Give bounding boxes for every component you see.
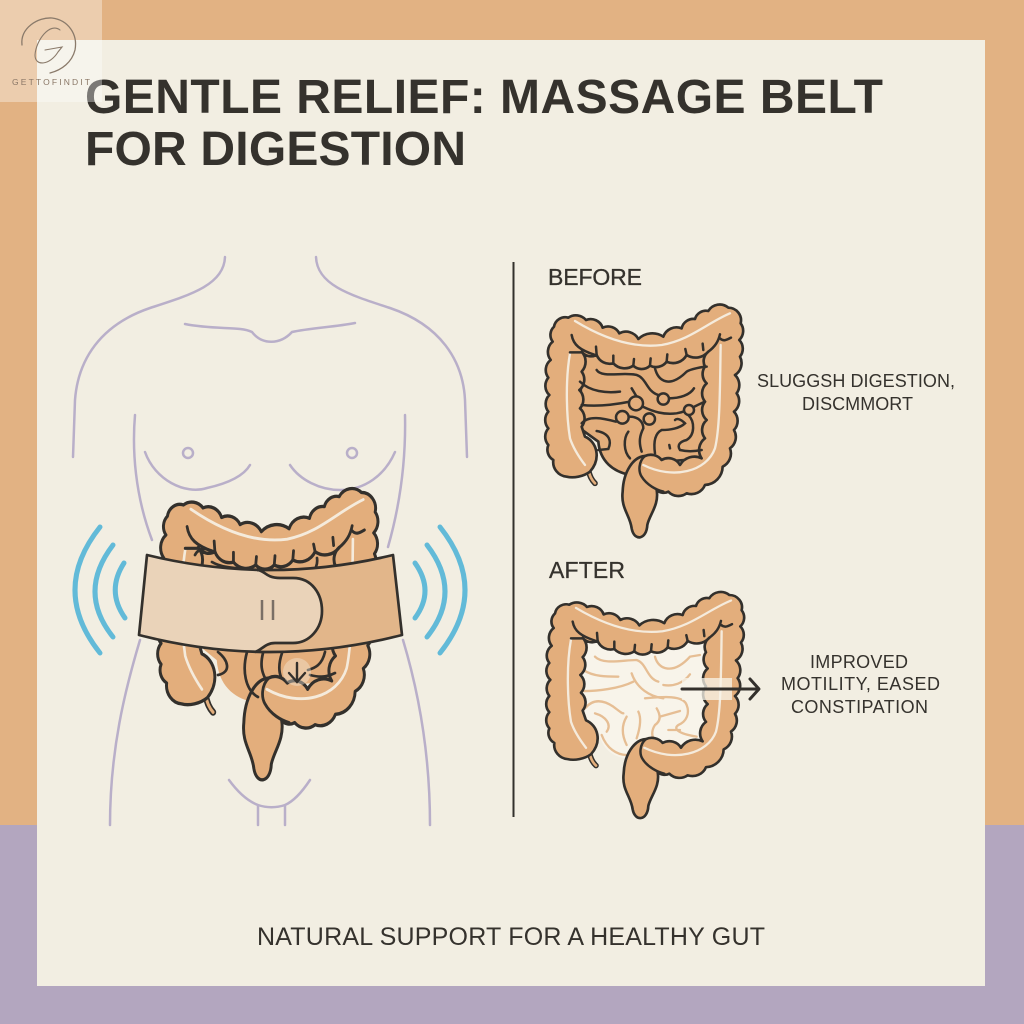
appendix: [588, 470, 595, 483]
title: GENTLE RELIEF: MASSAGE BELT: [85, 71, 883, 124]
massage belt: [139, 555, 402, 652]
small intestine mass: [196, 545, 339, 702]
logo swoosh and G: [22, 18, 76, 73]
colon: [158, 489, 378, 780]
arrow: after to caption: [682, 678, 759, 700]
icon: down arrow: [283, 658, 311, 686]
small intestine mass: [580, 350, 708, 475]
tangled intestine lines: [580, 367, 707, 458]
before colon illustration: [545, 305, 743, 537]
relaxed small intestine: [580, 640, 707, 758]
before caption: DISCMMORT: [802, 394, 913, 414]
vibration waves left: [75, 527, 125, 653]
vibration waves right: [415, 527, 465, 653]
before heading: BEFORE: [548, 264, 642, 290]
title: FOR DIGESTION: [85, 123, 466, 176]
after caption: CONSTIPATION: [791, 697, 928, 717]
pad outline: [255, 570, 322, 652]
divider line: [512, 262, 514, 817]
title: [85, 71, 883, 176]
watermark logo: [12, 18, 90, 87]
colon details: [567, 313, 731, 492]
belt control pad: [139, 555, 322, 652]
before caption: [757, 371, 955, 414]
after caption: IMPROVED: [810, 652, 908, 672]
belt band: [139, 555, 402, 652]
belt outline: [139, 555, 402, 652]
after colon illustration: [546, 592, 744, 818]
after caption: [781, 652, 940, 717]
main illustration: colon behind belt: [158, 489, 378, 780]
after heading: AFTER: [549, 557, 625, 583]
appendix: [206, 696, 213, 712]
logo wordmark: GETTOFINDIT: [12, 77, 90, 87]
colon: [545, 305, 743, 537]
trapped gas bubbles: [616, 393, 694, 425]
background: lavender band: [0, 825, 1024, 1024]
small intestine lines above and below belt: [195, 549, 335, 697]
body outline figure: [73, 257, 467, 825]
pause symbol: [262, 600, 273, 620]
after caption: MOTILITY, EASED: [781, 674, 940, 694]
before caption: SLUGGSH DIGESTION,: [757, 371, 955, 391]
colon details: [182, 500, 364, 723]
watermark tile: [0, 0, 102, 102]
footer tagline: NATURAL SUPPORT FOR A HEALTHY GUT: [257, 923, 765, 951]
colon: [546, 592, 744, 818]
